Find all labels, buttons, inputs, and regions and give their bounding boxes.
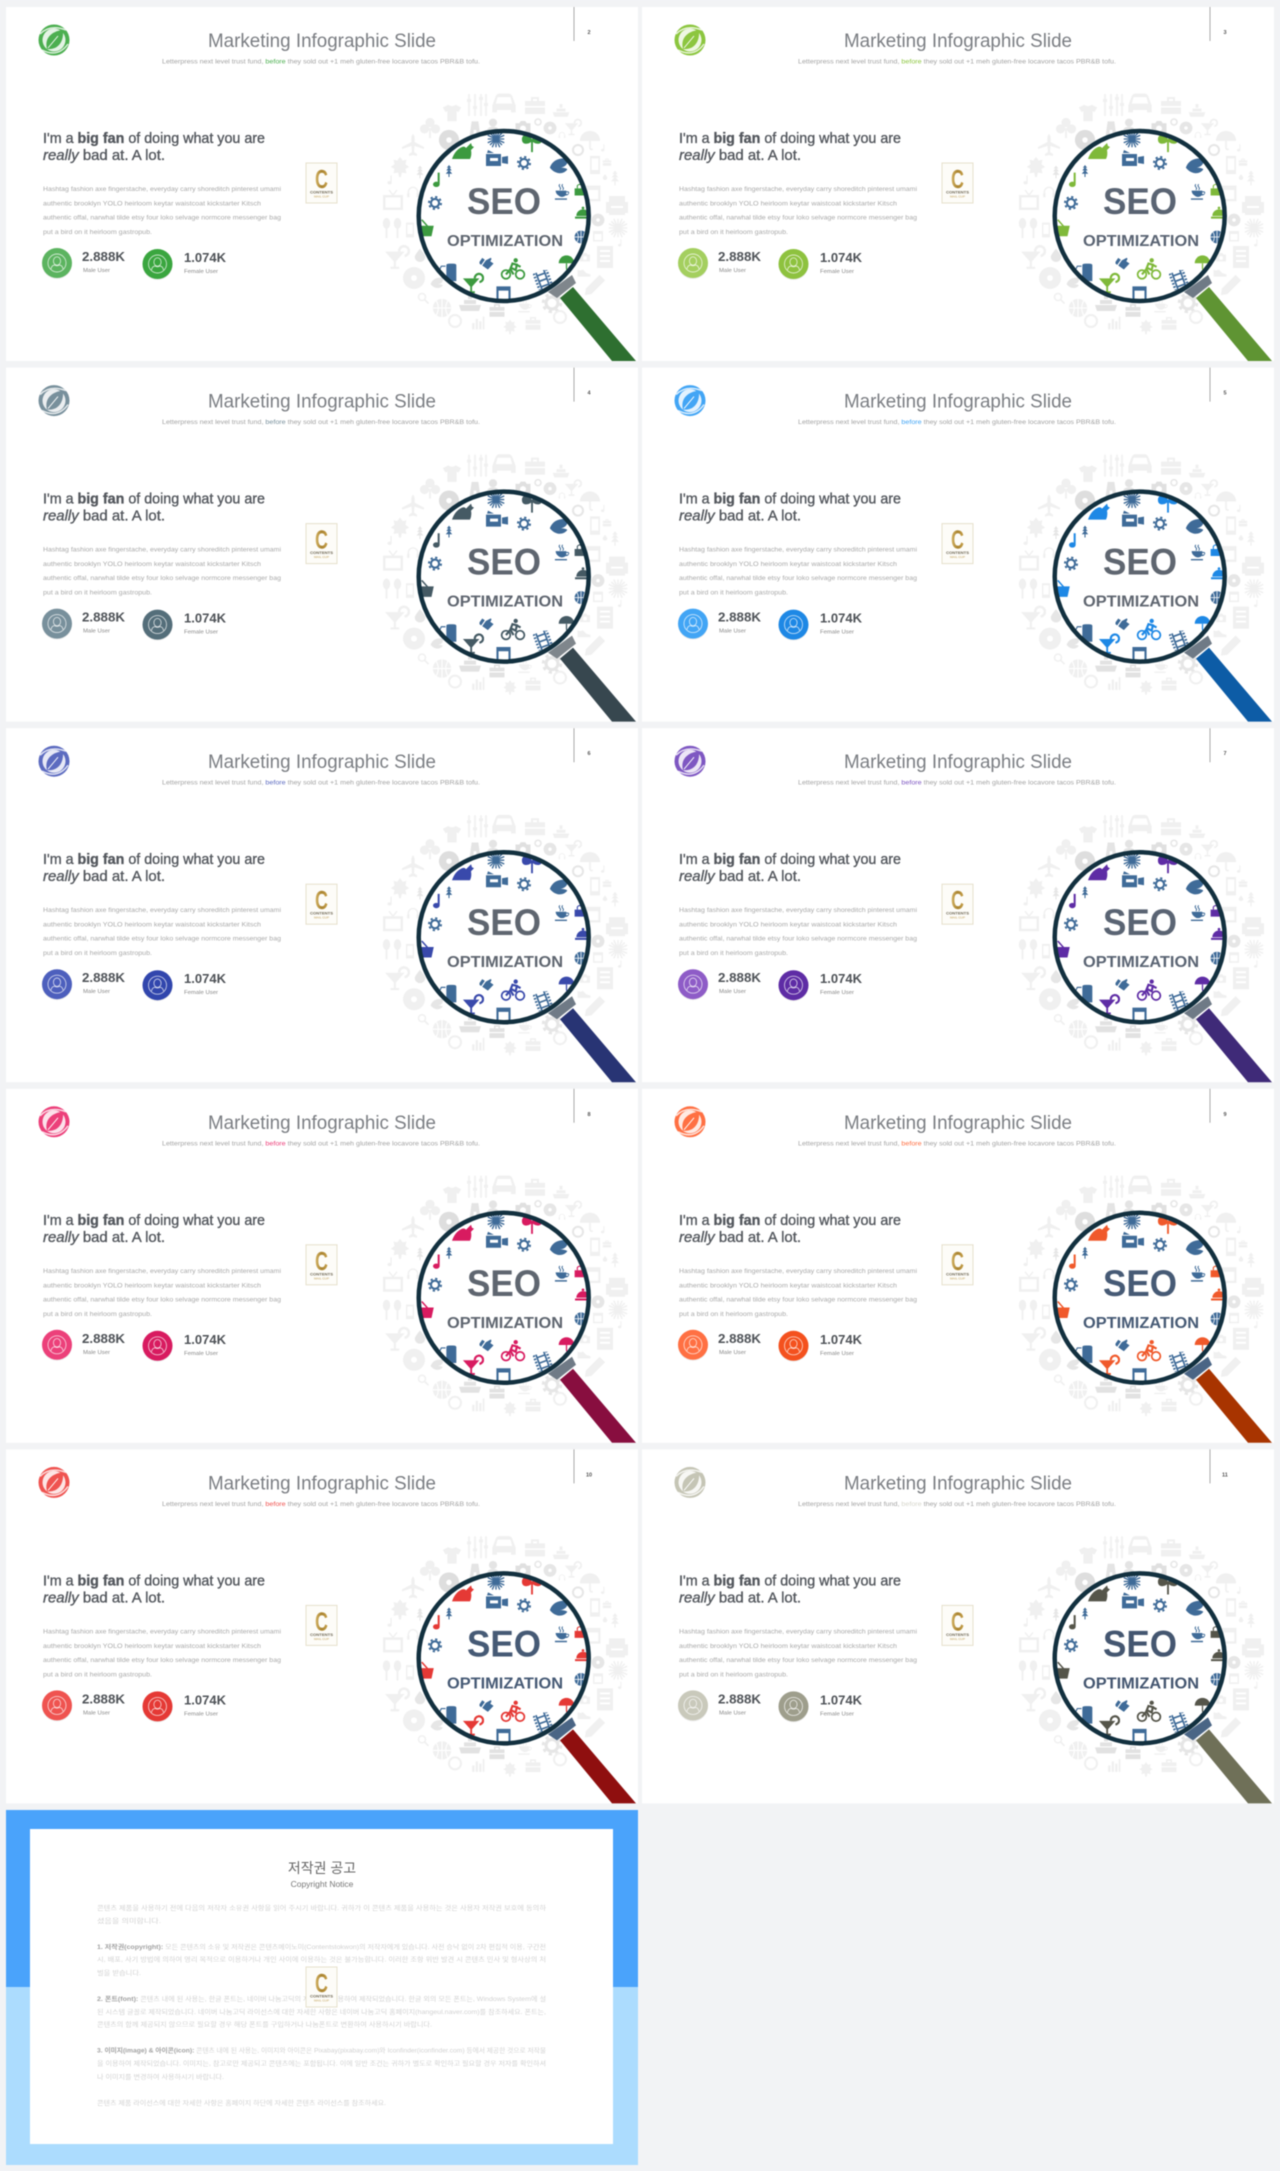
stat: male users: Male User — [83, 268, 110, 274]
body text: authentic offal, narwhal tilde etsy four loko selvage normcore messenger bag — [679, 936, 917, 943]
stat: female users — [142, 1331, 227, 1362]
slide title: Marketing Infographic Slide — [208, 30, 436, 52]
heading: really bad at. A lot. — [679, 1230, 801, 1246]
stat: female users: Female User — [820, 990, 854, 996]
gold badge — [306, 1605, 337, 1645]
body text: authentic brooklyn YOLO heirloom keytar waistcoat kickstarter Kitsch — [43, 561, 261, 568]
stat: female users — [778, 1691, 863, 1722]
heading — [43, 1573, 265, 1606]
body text: authentic offal, narwhal tilde etsy four loko selvage normcore messenger bag — [43, 214, 281, 222]
magnifier: OPTIMIZATION — [1083, 1675, 1199, 1692]
copyright subtitle: Copyright Notice — [291, 1879, 354, 1889]
heading: really bad at. A lot. — [679, 148, 801, 164]
stat: male users — [42, 1330, 126, 1361]
stat: female users — [142, 1691, 227, 1722]
heading: really bad at. A lot. — [43, 509, 165, 525]
heading — [43, 852, 265, 885]
heading: really bad at. A lot. — [43, 1230, 165, 1246]
body text: put a bird on it heirloom gastropub. — [43, 590, 152, 597]
stat: female users — [142, 610, 227, 641]
heading: really bad at. A lot. — [679, 1590, 801, 1606]
slide: orange, page 9 — [642, 1089, 1274, 1443]
subtitle: Letterpress next level trust fund, before they sold out +1 meh gluten-free locavore tacos PBR&B tofu. — [798, 1140, 1116, 1147]
stat: male users: 2.888K — [82, 1691, 126, 1706]
stat: female users: 1.074K — [184, 1692, 227, 1707]
gold badge — [306, 163, 337, 203]
stat: female users — [142, 249, 227, 280]
stat: male users — [42, 969, 126, 1000]
gold badge — [942, 524, 973, 564]
body text: Hashtag fashion axe fingerstache, everyday carry shoreditch pinterest umami — [679, 186, 917, 193]
stat: male users: 2.888K — [82, 249, 126, 264]
stat: female users — [778, 1331, 863, 1362]
page number: 5 — [1224, 391, 1227, 397]
copyright intro: 셨음을 의미합니다. — [97, 1916, 161, 1925]
icon: leaf logo — [38, 1106, 70, 1137]
stat: male users: Male User — [83, 629, 110, 635]
slide title: Marketing Infographic Slide — [844, 1112, 1072, 1134]
body text: authentic brooklyn YOLO heirloom keytar waistcoat kickstarter Kitsch — [679, 922, 897, 929]
page number — [574, 1449, 592, 1483]
subtitle: Letterpress next level trust fund, before they sold out +1 meh gluten-free locavore tacos PBR&B tofu. — [162, 1140, 480, 1147]
stat: male users — [678, 248, 762, 279]
copyright section 1: 벌을 받습니다. — [97, 1968, 141, 1977]
stat: female users: Female User — [184, 269, 218, 275]
copyright section 2: 2. 폰트(font): 콘텐츠 내에 된 사용는, 한글 폰트는, 네이버 나눔고딕의 저작물을 사용하여 제작되었습니다. 한글 외의 모든 폰트는, Windows System에 설 — [97, 1994, 546, 2003]
stat: male users: Male User — [719, 989, 746, 995]
magnifier — [1055, 852, 1272, 1082]
slide title: Marketing Infographic Slide — [208, 1112, 436, 1134]
heading — [679, 492, 901, 525]
icon cloud — [1019, 94, 1264, 334]
slide title: Marketing Infographic Slide — [208, 751, 436, 773]
body text: authentic offal, narwhal tilde etsy four loko selvage normcore messenger bag — [679, 1657, 917, 1664]
stat: male users: 2.888K — [718, 1331, 762, 1346]
page number — [1210, 1089, 1227, 1123]
stat: male users: 2.888K — [718, 970, 762, 985]
icon: leaf logo — [674, 24, 706, 56]
magnifier: OPTIMIZATION — [447, 954, 563, 971]
slide: blue grey, page 4 — [6, 368, 638, 722]
heading: really bad at. A lot. — [43, 148, 165, 164]
copyright section 2: 콘텐츠의 함께 제공되지 않으므로 필요할 경우 해당 폰트를 구입하거나 나눔폰트로 변환하여 사용하시기 바랍니다. — [97, 2020, 432, 2028]
slide title: Marketing Infographic Slide — [844, 1472, 1072, 1494]
heading: really bad at. A lot. — [679, 869, 801, 885]
body text: Hashtag fashion axe fingerstache, everyday carry shoreditch pinterest umami — [43, 907, 281, 914]
magnifier — [1055, 1213, 1272, 1443]
heading: I'm a big fan of doing what you are — [43, 1213, 265, 1229]
magnifier — [1055, 491, 1272, 722]
slide: blue, page 5 — [642, 368, 1274, 722]
magnifier — [419, 852, 636, 1082]
body text: authentic brooklyn YOLO heirloom keytar waistcoat kickstarter Kitsch — [43, 1643, 261, 1650]
icon: leaf logo — [674, 1467, 706, 1498]
body text: put a bird on it heirloom gastropub. — [43, 950, 152, 957]
stat: female users: 1.074K — [184, 1332, 227, 1347]
magnifier: SEO — [467, 542, 541, 583]
slide: red, page 10 — [6, 1449, 638, 1803]
copyright section 2 — [97, 1994, 546, 2028]
stat: female users: Female User — [820, 269, 854, 275]
icon cloud — [383, 1536, 628, 1777]
stat: female users: 1.074K — [820, 1692, 863, 1707]
copyright section 3: 3. 이미지(image) & 아이콘(icon): 콘텐츠 내에 된 사용는, 이미지와 아이콘은 Pixabay(pixabay.com)와 Iconfinder(iconfinder.com) 등에서 제공한 것으로 저작물 — [97, 2046, 546, 2054]
subtitle: Letterpress next level trust fund, before they sold out +1 meh gluten-free locavore tacos PBR&B tofu. — [798, 419, 1116, 426]
stat: female users: 1.074K — [820, 250, 863, 265]
stat: female users: 1.074K — [184, 971, 227, 986]
body text — [679, 1628, 917, 1678]
stat: male users: 2.888K — [718, 610, 762, 625]
magnifier — [419, 491, 636, 722]
page number: 6 — [588, 751, 591, 757]
magnifier: SEO — [467, 1623, 541, 1664]
page number: 4 — [588, 391, 592, 397]
stat: male users: 2.888K — [82, 610, 126, 625]
icon: leaf logo — [38, 385, 70, 416]
heading — [43, 131, 265, 164]
heading — [679, 852, 901, 885]
stat: female users: Female User — [184, 1351, 218, 1357]
body text: Hashtag fashion axe fingerstache, everyday carry shoreditch pinterest umami — [43, 1268, 281, 1275]
slide: indigo, page 6 — [6, 728, 638, 1082]
stat: female users: Female User — [184, 630, 218, 636]
page number — [1210, 728, 1227, 762]
subtitle: Letterpress next level trust fund, before they sold out +1 meh gluten-free locavore tacos PBR&B tofu. — [162, 58, 480, 66]
heading: I'm a big fan of doing what you are — [679, 852, 901, 868]
stat: female users — [778, 249, 863, 280]
heading: I'm a big fan of doing what you are — [43, 1573, 265, 1589]
magnifier: OPTIMIZATION — [447, 233, 563, 250]
stat: male users — [678, 609, 762, 640]
body text: authentic offal, narwhal tilde etsy four loko selvage normcore messenger bag — [43, 575, 281, 582]
page number: 3 — [1224, 30, 1227, 36]
stat: male users — [678, 969, 762, 1000]
stat: male users: 2.888K — [82, 970, 126, 985]
heading: really bad at. A lot. — [43, 869, 165, 885]
icon: leaf logo — [674, 746, 706, 777]
heading: I'm a big fan of doing what you are — [679, 492, 901, 508]
slide: purple, page 7 — [642, 728, 1274, 1082]
body text: authentic offal, narwhal tilde etsy four loko selvage normcore messenger bag — [43, 1296, 281, 1303]
icon: leaf logo — [674, 1106, 706, 1137]
body text: authentic brooklyn YOLO heirloom keytar waistcoat kickstarter Kitsch — [679, 1282, 897, 1289]
body text — [43, 186, 281, 236]
heading: I'm a big fan of doing what you are — [43, 852, 265, 868]
subtitle: Letterpress next level trust fund, before they sold out +1 meh gluten-free locavore tacos PBR&B tofu. — [162, 780, 480, 787]
copyright footer: 콘텐츠 제품 라이선스에 대한 자세한 사항은 홈페이지 하단에 자세한 콘텐츠 라이선스를 참조하세요. — [97, 2098, 386, 2107]
stat: male users: 2.888K — [718, 1691, 762, 1706]
page number — [1210, 368, 1227, 402]
slide: lime, page 3 — [642, 7, 1274, 361]
magnifier: OPTIMIZATION — [1083, 1315, 1199, 1332]
gold badge — [306, 524, 337, 564]
body text — [43, 547, 281, 597]
slide title: Marketing Infographic Slide — [844, 391, 1072, 413]
body text: put a bird on it heirloom gastropub. — [679, 229, 788, 236]
heading: I'm a big fan of doing what you are — [679, 1573, 901, 1589]
stat: male users: Male User — [719, 268, 746, 274]
body text: authentic brooklyn YOLO heirloom keytar waistcoat kickstarter Kitsch — [679, 1643, 897, 1650]
page number — [1210, 7, 1227, 41]
stat: female users: 1.074K — [184, 250, 227, 265]
heading: really bad at. A lot. — [43, 1590, 165, 1606]
body text: put a bird on it heirloom gastropub. — [679, 590, 788, 597]
gold badge — [942, 1605, 973, 1645]
panel: copyright notice — [6, 1810, 638, 2165]
stat: male users — [678, 1690, 762, 1721]
icon cloud — [383, 94, 628, 334]
magnifier — [419, 1573, 636, 1803]
copyright title: 저작권 공고 — [288, 1860, 356, 1876]
heading — [679, 1213, 901, 1246]
icon cloud — [1019, 1536, 1264, 1777]
body text: Hashtag fashion axe fingerstache, everyday carry shoreditch pinterest umami — [679, 1628, 917, 1635]
page number: 7 — [1224, 751, 1227, 757]
heading: I'm a big fan of doing what you are — [679, 131, 901, 147]
body text — [679, 186, 917, 236]
subtitle: Letterpress next level trust fund, before they sold out +1 meh gluten-free locavore tacos PBR&B tofu. — [798, 1501, 1116, 1508]
subtitle: Letterpress next level trust fund, before they sold out +1 meh gluten-free locavore tacos PBR&B tofu. — [798, 58, 1116, 66]
stat: male users: Male User — [83, 1710, 110, 1716]
heading: I'm a big fan of doing what you are — [43, 492, 265, 508]
icon: leaf logo — [38, 24, 70, 56]
magnifier — [419, 131, 636, 361]
body text: authentic offal, narwhal tilde etsy four loko selvage normcore messenger bag — [43, 936, 281, 943]
magnifier: SEO — [1103, 542, 1177, 583]
body text: Hashtag fashion axe fingerstache, everyday carry shoreditch pinterest umami — [43, 547, 281, 554]
page number — [1210, 1449, 1228, 1483]
stat: male users — [42, 1690, 126, 1721]
subtitle: Letterpress next level trust fund, before they sold out +1 meh gluten-free locavore tacos PBR&B tofu. — [798, 780, 1116, 787]
magnifier: SEO — [467, 181, 541, 222]
copyright intro: 콘텐츠 제품을 사용하기 전에 다음의 저작자 소유권 사항을 읽어 주시기 바랍니다. 귀하가 이 콘텐츠 제품을 사용하는 것은 사용자 저작권 보호에 동의하 — [97, 1903, 546, 1912]
page number — [574, 7, 591, 41]
copyright section 2: 된 시스템 글꼴로 제작되었습니다. 네이버 나눔고딕 라이선스에 대한 자세한 사항은 네이버 나눔고딕 홈페이지(hangeul.naver.com)를 참조하세요. 폰트는, — [97, 2007, 546, 2016]
body text: authentic offal, narwhal tilde etsy four loko selvage normcore messenger bag — [679, 214, 917, 222]
body text: authentic offal, narwhal tilde etsy four loko selvage normcore messenger bag — [679, 575, 917, 582]
body text: Hashtag fashion axe fingerstache, everyday carry shoreditch pinterest umami — [43, 1628, 281, 1635]
body text — [43, 1628, 281, 1678]
gold badge — [942, 884, 973, 924]
stat: female users: 1.074K — [820, 1332, 863, 1347]
magnifier: SEO — [1103, 1623, 1177, 1664]
page number: 11 — [1222, 1472, 1228, 1478]
stat: male users — [42, 248, 126, 279]
stat: female users: Female User — [184, 990, 218, 996]
icon: leaf logo — [38, 1467, 70, 1498]
copyright section 1: 1. 저작권(copyright): 모든 콘텐츠의 소유 및 저작권은 콘텐츠메이노미(Contentstokwon)의 저작자에게 있습니다. 사전 승낙 없이 2차 편집적 이용, 구간전 — [97, 1942, 546, 1951]
page number: 2 — [588, 30, 591, 36]
body text: authentic brooklyn YOLO heirloom keytar waistcoat kickstarter Kitsch — [43, 1282, 261, 1289]
body text: put a bird on it heirloom gastropub. — [679, 1311, 788, 1318]
magnifier: OPTIMIZATION — [447, 1315, 563, 1332]
body text: authentic brooklyn YOLO heirloom keytar waistcoat kickstarter Kitsch — [679, 561, 897, 568]
copyright section 1: 시, 배포, 사기 방법에 의하여 영리 목적으로 이용하거나 개인 사이에 이용하는 것은 불가능합니다. 이러한 조항 위반 발견 시 콘텐츠 민사 및 형사상의 처 — [97, 1954, 546, 1964]
page number: 9 — [1224, 1112, 1227, 1118]
body text: put a bird on it heirloom gastropub. — [679, 1671, 788, 1678]
icon cloud — [383, 815, 628, 1056]
body text: authentic brooklyn YOLO heirloom keytar waistcoat kickstarter Kitsch — [43, 200, 261, 208]
magnifier: SEO — [1103, 1263, 1177, 1304]
heading — [43, 492, 265, 525]
stat: female users — [142, 970, 227, 1001]
stat: female users: 1.074K — [820, 611, 863, 626]
slide: pink, page 8 — [6, 1089, 638, 1443]
body text: Hashtag fashion axe fingerstache, everyday carry shoreditch pinterest umami — [679, 907, 917, 914]
stat: male users — [678, 1330, 762, 1361]
body text — [43, 1268, 281, 1318]
icon cloud — [1019, 815, 1264, 1056]
icon cloud — [1019, 1175, 1264, 1416]
magnifier: SEO — [1103, 181, 1177, 222]
stat: male users: Male User — [719, 1710, 746, 1716]
magnifier: SEO — [1103, 902, 1177, 943]
copyright section 3 — [97, 2046, 546, 2081]
body text — [679, 547, 917, 597]
slide title: Marketing Infographic Slide — [208, 391, 436, 413]
magnifier: OPTIMIZATION — [1083, 233, 1199, 250]
stat: female users: Female User — [820, 1711, 854, 1717]
icon: leaf logo — [674, 385, 706, 416]
subtitle: Letterpress next level trust fund, before they sold out +1 meh gluten-free locavore tacos PBR&B tofu. — [162, 1501, 480, 1508]
page number: 8 — [588, 1112, 591, 1118]
body text: authentic brooklyn YOLO heirloom keytar waistcoat kickstarter Kitsch — [679, 200, 897, 208]
body text: put a bird on it heirloom gastropub. — [43, 1671, 152, 1678]
body text: Hashtag fashion axe fingerstache, everyday carry shoreditch pinterest umami — [43, 186, 281, 193]
body text: put a bird on it heirloom gastropub. — [43, 229, 152, 236]
stat: female users: Female User — [820, 1351, 854, 1357]
body text — [679, 907, 917, 957]
stat: male users: Male User — [719, 1350, 746, 1356]
page number — [574, 728, 591, 762]
copyright section 3: 을 이용하여 제작되었습니다. 이미지는, 참고로만 제공되고 콘텐츠에는 포함됩니다. 이에 일반 조건는 귀하가 별도로 확인하고 필요할 경우 저자를 확인하셔 — [97, 2058, 546, 2068]
slide: green, page 2 — [6, 7, 638, 361]
page number — [574, 1089, 591, 1123]
gold badge — [942, 1245, 973, 1285]
page number: 10 — [586, 1472, 592, 1478]
slide: greige, page 11 — [642, 1449, 1274, 1803]
stat: male users: Male User — [83, 1350, 110, 1356]
heading: really bad at. A lot. — [679, 509, 801, 525]
body text: Hashtag fashion axe fingerstache, everyday carry shoreditch pinterest umami — [679, 1268, 917, 1275]
body text — [43, 907, 281, 957]
heading — [679, 131, 901, 164]
stat: female users — [778, 610, 863, 641]
page number — [574, 368, 592, 402]
gold badge — [306, 1967, 337, 2007]
magnifier: SEO — [467, 1263, 541, 1304]
magnifier: SEO — [467, 902, 541, 943]
heading: I'm a big fan of doing what you are — [679, 1213, 901, 1229]
stat: female users: 1.074K — [184, 611, 227, 626]
body text: Hashtag fashion axe fingerstache, everyday carry shoreditch pinterest umami — [679, 547, 917, 554]
body text: put a bird on it heirloom gastropub. — [43, 1311, 152, 1318]
stat: male users: Male User — [83, 989, 110, 995]
stat: male users: 2.888K — [718, 249, 762, 264]
copyright section 3: 나 이미지를 변경하여 사용하시기 바랍니다. — [97, 2072, 224, 2081]
icon: leaf logo — [38, 746, 70, 777]
subtitle: Letterpress next level trust fund, before they sold out +1 meh gluten-free locavore tacos PBR&B tofu. — [162, 419, 480, 426]
gold badge — [306, 1245, 337, 1285]
body text: authentic offal, narwhal tilde etsy four loko selvage normcore messenger bag — [679, 1296, 917, 1303]
body text: authentic brooklyn YOLO heirloom keytar waistcoat kickstarter Kitsch — [43, 922, 261, 929]
copyright intro — [97, 1903, 546, 1925]
body text: authentic offal, narwhal tilde etsy four loko selvage normcore messenger bag — [43, 1657, 281, 1664]
heading — [679, 1573, 901, 1606]
stat: female users: Female User — [184, 1711, 218, 1717]
magnifier: OPTIMIZATION — [447, 1675, 563, 1692]
heading: I'm a big fan of doing what you are — [43, 131, 265, 147]
slide title: Marketing Infographic Slide — [844, 30, 1072, 52]
copyright section 1 — [97, 1942, 546, 1977]
body text — [679, 1268, 917, 1318]
gold badge — [942, 163, 973, 203]
heading — [43, 1213, 265, 1246]
magnifier: OPTIMIZATION — [447, 594, 563, 611]
slide title: Marketing Infographic Slide — [844, 751, 1072, 773]
slide title: Marketing Infographic Slide — [208, 1472, 436, 1494]
magnifier: OPTIMIZATION — [1083, 594, 1199, 611]
stat: male users — [42, 609, 126, 640]
gold badge — [306, 884, 337, 924]
icon cloud — [383, 454, 628, 695]
icon cloud — [383, 1175, 628, 1416]
stat: male users: 2.888K — [82, 1331, 126, 1346]
stat: female users: 1.074K — [820, 971, 863, 986]
magnifier — [419, 1213, 636, 1443]
magnifier — [1055, 131, 1272, 361]
body text: put a bird on it heirloom gastropub. — [679, 950, 788, 957]
stat: female users — [778, 970, 863, 1001]
magnifier: OPTIMIZATION — [1083, 954, 1199, 971]
icon cloud — [1019, 454, 1264, 695]
stat: female users: Female User — [820, 630, 854, 636]
magnifier — [1055, 1573, 1272, 1803]
stat: male users: Male User — [719, 629, 746, 635]
